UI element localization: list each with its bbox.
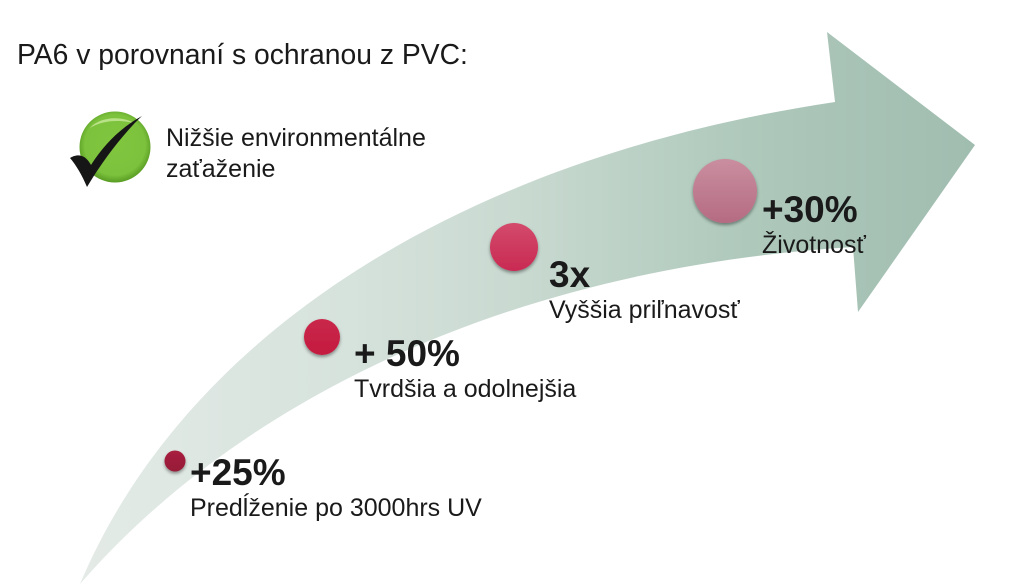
text: environmental load: Nižšie environmentálne [166, 124, 426, 152]
stat: +30%: Životnosť [762, 231, 866, 259]
stat: +50%: Tvrdšia a odolnejšia [354, 375, 576, 403]
stat: 3x [549, 254, 740, 324]
stat: +25%: Predĺženie po 3000hrs UV [190, 494, 482, 522]
marker: +25% [164, 450, 186, 472]
text: environmental load: zaťaženie [166, 155, 275, 183]
stat: 3x: 3x [549, 254, 590, 295]
title: PA6 v porovnaní s ochranou z PVC: [17, 38, 468, 70]
stat: +30% [762, 189, 866, 259]
text: environmental load [166, 124, 426, 183]
stat: +50%: + 50% [354, 333, 460, 374]
stat: +25%: +25% [190, 452, 286, 493]
stat: +50% [354, 333, 576, 403]
stat: +30%: +30% [762, 189, 858, 230]
marker: +50% [304, 319, 340, 355]
marker: 3x [490, 223, 538, 271]
marker: +30% [693, 159, 757, 223]
stat: 3x: Vyššia priľnavosť [549, 296, 740, 324]
stat: +25% [190, 452, 482, 522]
icon: green check mark [70, 112, 150, 187]
